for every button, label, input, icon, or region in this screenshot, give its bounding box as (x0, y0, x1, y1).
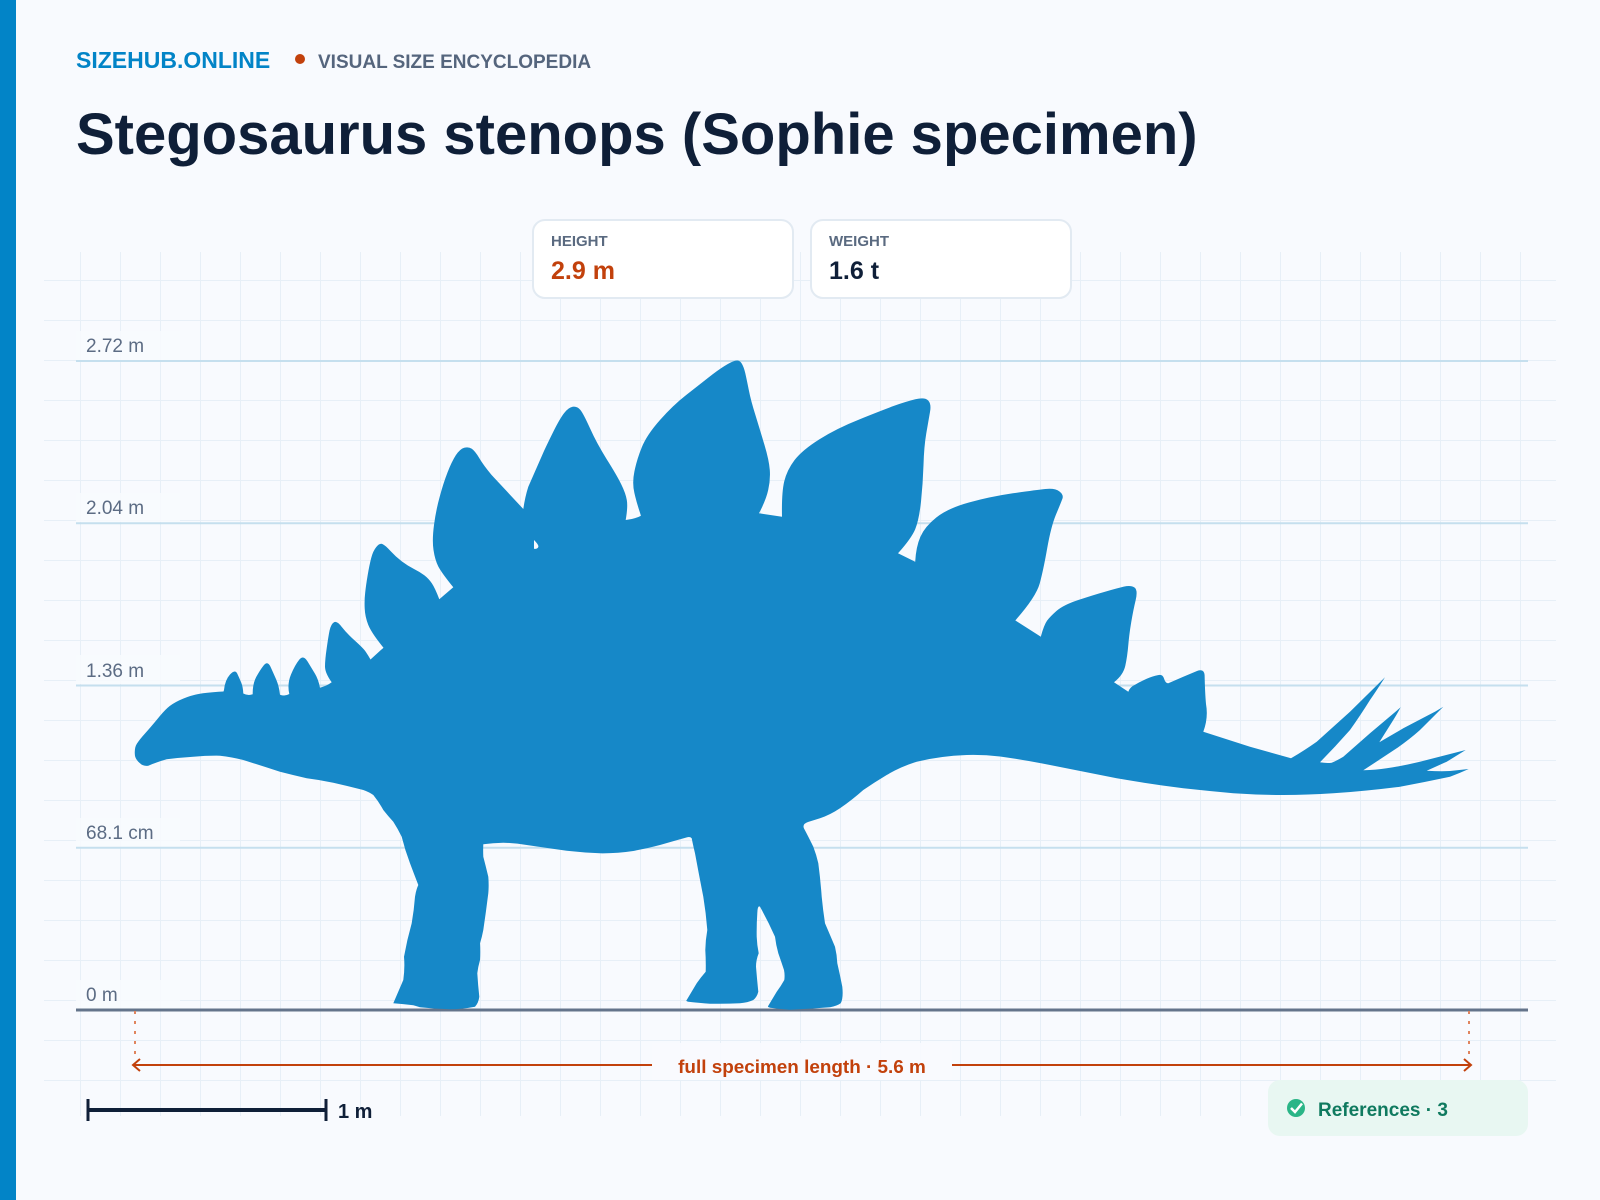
level line and label: 2.04 m: 2.04 m (86, 498, 144, 519)
scale bar: 1 m (88, 1099, 372, 1123)
header: brand and tagline: SIZEHUB.ONLINE (76, 47, 270, 73)
length arrow left (133, 1059, 652, 1071)
dotted extension lines (135, 1011, 1469, 1056)
ground line and label: 0 m (76, 980, 1528, 1010)
level line and label: 2.72 m (76, 331, 1528, 361)
references badge (1268, 1080, 1528, 1136)
stat card: height: 2.9 m (551, 257, 615, 285)
level line and label: 2.72 m: 2.72 m (86, 336, 144, 357)
stat card: weight (811, 220, 1071, 298)
icon: check (1287, 1099, 1305, 1117)
stegosaurus silhouette (135, 360, 1469, 1010)
ground line and label: 0 m: 0 m (86, 985, 118, 1006)
level line and label: 68.1 cm: 68.1 cm (86, 823, 154, 844)
stat card: height: HEIGHT (551, 233, 608, 250)
stat card: height (533, 220, 793, 298)
level line and label: 68.1 cm (76, 818, 1528, 848)
stat card: weight: 1.6 t (829, 257, 880, 285)
height scale with level lines (76, 331, 1528, 1010)
title: Stegosaurus stenops (Sophie specimen) (76, 102, 1198, 167)
left accent bar (0, 0, 16, 1200)
level line and label: 1.36 m: 1.36 m (86, 661, 144, 682)
length label: full specimen length · 5.6 m (678, 1057, 926, 1078)
header: brand and tagline: VISUAL SIZE ENCYCLOPEDIA (318, 52, 591, 73)
level line and label: 1.36 m (76, 655, 1528, 686)
length dimension (133, 1011, 1471, 1080)
header: brand and tagline (76, 47, 591, 73)
scale bar: 1 m: 1 m (338, 1101, 372, 1123)
length arrow right (952, 1059, 1471, 1071)
level line and label: 2.04 m (76, 493, 1528, 523)
references badge: References · 3 (1318, 1100, 1448, 1121)
stat card: weight: WEIGHT (829, 233, 889, 250)
